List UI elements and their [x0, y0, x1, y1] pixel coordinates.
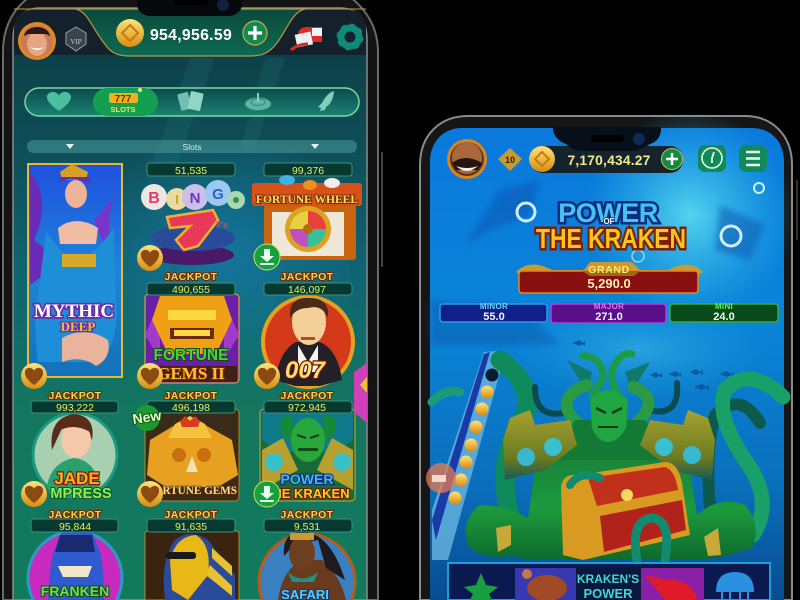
game tile: Bingo 7s: I [175, 192, 179, 207]
game tile: Fortune Gems II: GEMS II [157, 364, 225, 383]
favourites tab [47, 92, 71, 111]
grand jackpot panel [516, 262, 703, 293]
wrist bands [496, 525, 721, 556]
add coins button [243, 21, 267, 45]
jackpot label row 3: JACKPOT [49, 390, 102, 402]
promo side tab [354, 363, 367, 423]
left shoulder armor [503, 410, 577, 480]
jackpot pill: 007: 146,097 [288, 284, 326, 296]
Mythic Deep logo: MYTHIC [34, 301, 114, 322]
game tile: Fortune Wheel [252, 175, 362, 260]
game tile: Franken Cash [28, 531, 122, 600]
major jackpot panel: 271.0 [595, 311, 623, 323]
game tile: Bingo 7s [141, 180, 245, 265]
jackpot pill: Fortune Gems II: 490,655 [172, 284, 210, 296]
left phone [3, 0, 383, 600]
jackpot pill: Power of the Kraken [264, 401, 352, 414]
player avatar [18, 22, 56, 60]
jackpot pill: Franken Cash [31, 519, 118, 533]
Fortune Gems II logo: FORTUNE [154, 347, 228, 364]
avatar [447, 139, 487, 179]
head [590, 390, 628, 442]
right phone frame [420, 116, 792, 600]
symbol: turtle [515, 568, 576, 600]
jackpot pill: Fortune Wheel [264, 163, 352, 177]
bubbles [517, 183, 764, 262]
torso and arms [466, 432, 756, 560]
game tile: Jade Empress [33, 413, 117, 502]
Fortune Wheel logo: FORTUNE WHEEL [256, 192, 358, 206]
major jackpot panel [551, 302, 666, 323]
coin balance: 954,956.59 [150, 27, 232, 44]
Power of the Kraken logo: POWER [281, 471, 333, 487]
treasure chest [561, 462, 690, 560]
small fish [572, 340, 734, 390]
jackpot label row 3: JACKPOT [281, 390, 334, 402]
game tile: Safari [259, 532, 355, 600]
jackpot pill: 007 [264, 283, 352, 296]
tentacle over chest [570, 475, 667, 560]
jackpot pill: Fortune Wheel: 99,376 [292, 165, 324, 177]
game tile: Power of the Kraken: THE KRAKEN [264, 486, 350, 501]
game title: POWER [558, 198, 658, 228]
rocket tab [318, 91, 334, 111]
kraken figure [432, 354, 783, 560]
game tile: 007 [261, 295, 355, 389]
VIP badge: VIP [70, 38, 82, 46]
jackpot label row 4: JACKPOT [165, 509, 218, 521]
jackpot pill: Bingo [147, 163, 235, 177]
mini jackpot panel: 24.0 [713, 311, 735, 323]
jackpot label row 2 [165, 271, 334, 283]
game tile: Mythic Deep: DEEP [61, 319, 95, 334]
tentacles [432, 360, 783, 535]
grand jackpot panel: GRAND [588, 264, 630, 276]
clock button [698, 145, 726, 172]
VIP 10 badge: 10 [505, 155, 515, 165]
right phone screen background [430, 110, 795, 600]
mini jackpot panel [670, 302, 778, 323]
jackpot pill: Power of the Kraken: 972,945 [288, 402, 326, 414]
jackpot pill: Franken Cash: 95,844 [59, 521, 91, 533]
left phone side button [381, 152, 383, 267]
game tile: Bingo 7s: B [148, 190, 160, 207]
game tile: Fortune Gems [145, 409, 239, 501]
jackpot pill: Fortune Gems: 496,198 [172, 402, 210, 414]
game title: OF [603, 217, 615, 226]
jackpot label row 2: JACKPOT [281, 271, 334, 283]
game tile: Power of the Kraken [260, 409, 355, 501]
minor jackpot panel: 55.0 [483, 311, 505, 323]
symbol: red fish [641, 568, 704, 600]
symbols panel [448, 563, 770, 600]
Fortune Gems logo: FORTUNE GEMS [147, 483, 237, 497]
jackpot pill: Safari: 9,531 [294, 521, 320, 533]
game tile: Mythic Deep [28, 164, 122, 377]
jackpot label row 3 [49, 390, 334, 402]
jackpot pill: Fortune Gems II [147, 283, 235, 296]
jackpot label row 4: JACKPOT [281, 509, 334, 521]
minor jackpot panel [440, 302, 547, 323]
game tile: Bingo 7s: N [190, 190, 200, 207]
game tile: pharaoh [145, 531, 239, 600]
jackpot pill: pharaoh game: 91,635 [175, 521, 207, 533]
right shoulder armor [640, 410, 715, 480]
jackpot pill: Bingo: 51,535 [175, 165, 207, 177]
right phone side button [796, 180, 798, 240]
symbol: Kraken's Power: KRAKEN'S [577, 572, 639, 586]
slots tab active: SLOTS [110, 105, 136, 114]
jackpot pill: Fortune Gems [147, 401, 235, 414]
jackpot label row 2: JACKPOT [165, 271, 218, 283]
slots filter bar: Slots [183, 142, 201, 152]
Franken Cash logo: FRANKEN [41, 583, 109, 599]
VIP 10 badge [498, 148, 522, 171]
neck and chest [555, 420, 665, 460]
left phone top bar [14, 9, 366, 56]
game tile: Fortune Gems II [145, 294, 239, 383]
floating puzzle button [426, 463, 456, 493]
major jackpot panel: MAJOR [594, 302, 624, 311]
roulette tab [245, 93, 271, 110]
jackpot label row 4 [49, 509, 334, 521]
cards tab [177, 91, 204, 111]
download badges [254, 244, 280, 507]
new badge: New [131, 407, 162, 427]
coin balance bar: 7,170,434.27 [568, 153, 651, 168]
left phone screen background [13, 8, 367, 600]
jackpot pill: Jade Empress: 993,222 [56, 402, 94, 414]
left phone notch [137, 0, 242, 16]
horns [535, 354, 677, 423]
007 logo: 007 [285, 357, 327, 384]
Jade Empress logo: JADE [54, 469, 100, 488]
slots tab active: 777 [115, 94, 132, 105]
coin icon [116, 19, 144, 47]
category navigation bar [25, 88, 359, 116]
game title [536, 198, 686, 254]
right phone [420, 110, 798, 600]
menu button [739, 145, 767, 172]
game tile: Bingo 7s: G [212, 186, 224, 203]
mini jackpot panel: MINI [715, 302, 733, 311]
slots tab active [93, 88, 158, 116]
symbol: jellyfish [716, 572, 754, 600]
jackpot label row 4: JACKPOT [49, 509, 102, 521]
game tile: Bingo 7s: 7's [216, 220, 228, 230]
jackpot pill: pharaoh game [147, 519, 235, 533]
game tile: Jade Empress: MPRESS [50, 486, 112, 502]
coin collector strip [432, 351, 502, 560]
slots filter bar [27, 140, 357, 153]
minor jackpot panel: MINOR [480, 302, 508, 311]
left phone frame [3, 0, 378, 600]
favourite heart badges [21, 245, 280, 507]
mailbox icon [291, 27, 322, 50]
game title: THE KRAKEN [536, 223, 686, 254]
coin balance bar [529, 146, 683, 173]
jackpot pill: Jade Empress [31, 401, 118, 414]
VIP badge [66, 27, 86, 51]
right phone notch [553, 127, 661, 151]
settings gear [338, 25, 362, 49]
fins [567, 360, 650, 392]
jackpot pill: Safari [264, 519, 352, 533]
symbol: Kraken's Power [576, 568, 641, 600]
grand jackpot panel: 5,290.0 [587, 276, 631, 291]
symbol: starfish [464, 573, 498, 600]
jackpot label row 3: JACKPOT [165, 390, 218, 402]
